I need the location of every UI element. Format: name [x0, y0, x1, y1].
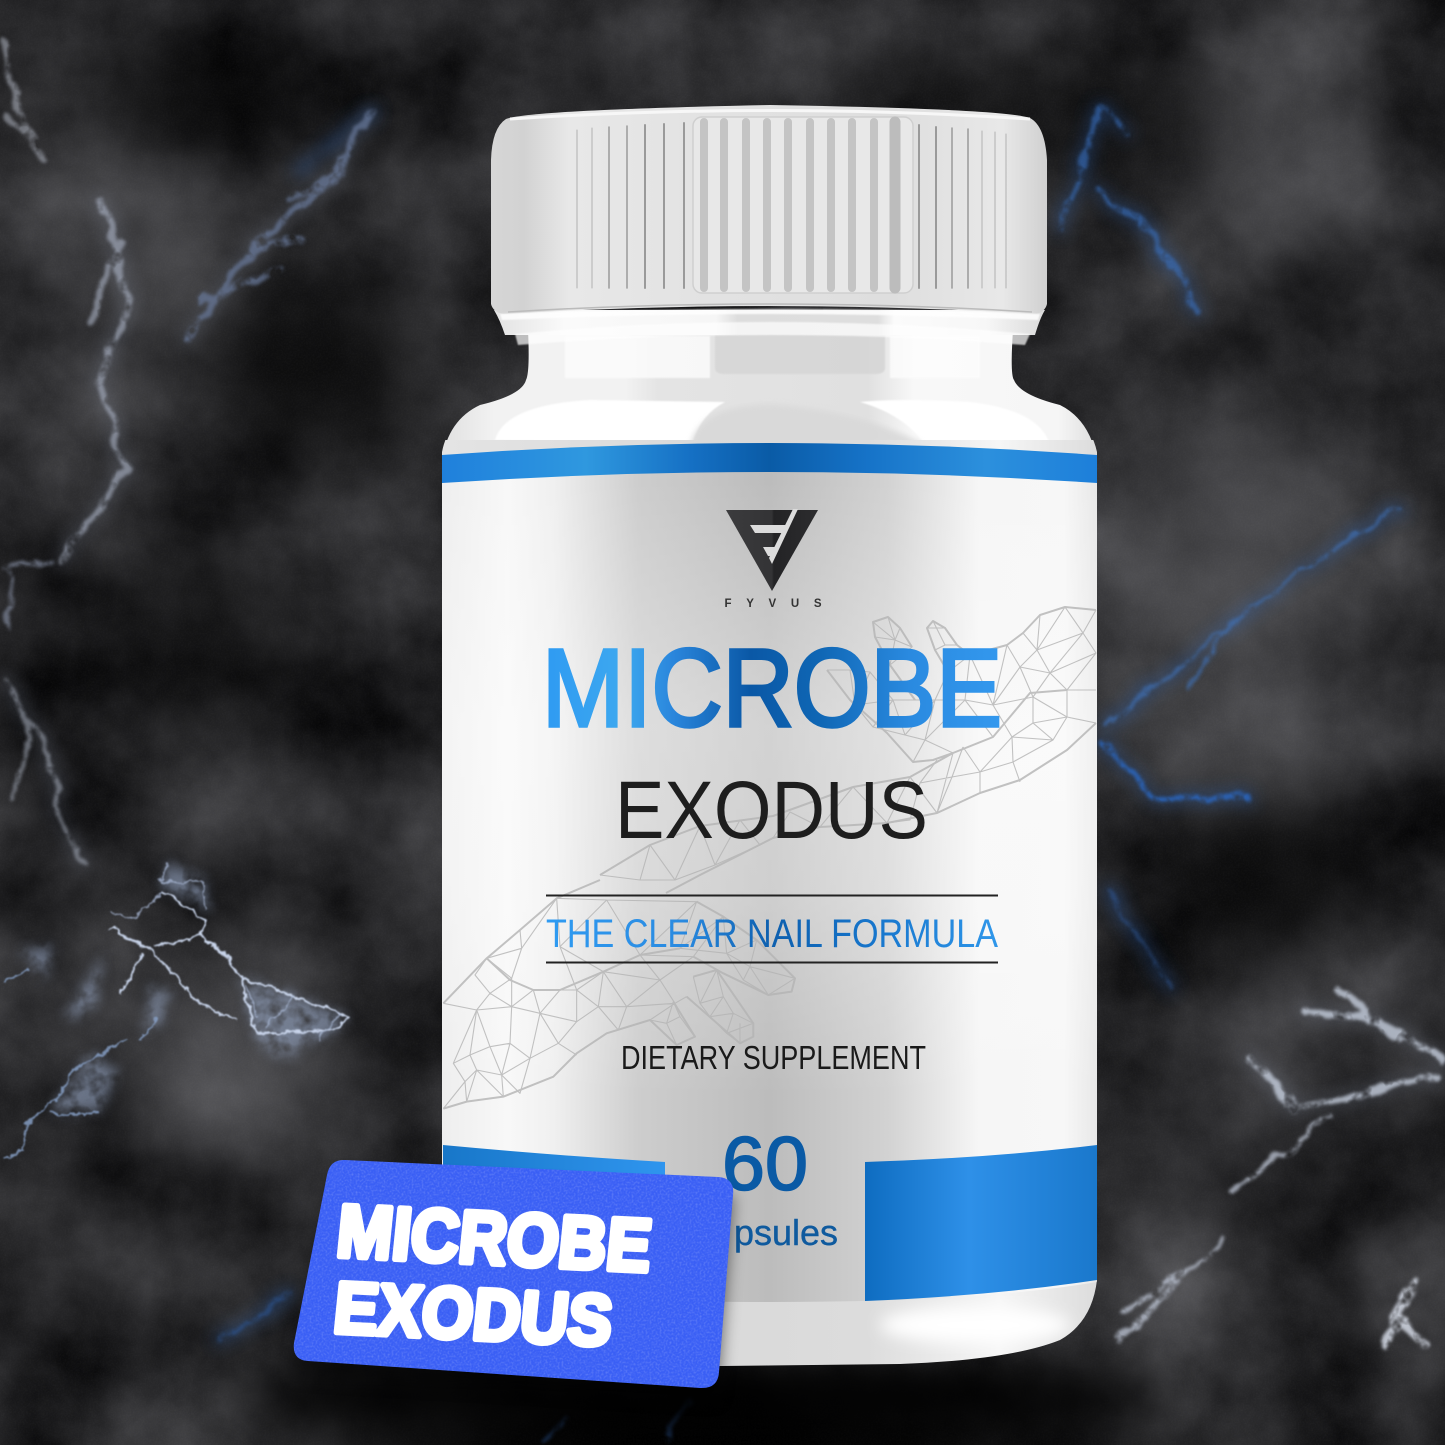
product title: EXODUS: EXODUS	[615, 765, 928, 856]
card surface	[294, 1160, 733, 1388]
blue top band	[442, 443, 1097, 483]
dietary supplement text: DIETARY SUPPLEMENT	[621, 1039, 926, 1076]
bright vein cluster, lower left	[5, 863, 350, 1157]
blue name card	[293, 1160, 733, 1400]
blue bottom block, left	[443, 1145, 665, 1300]
product bottle	[442, 105, 1097, 1370]
card title line 1: MICROBE	[333, 1189, 655, 1287]
blue bottom block, right	[865, 1145, 1097, 1301]
bottle neck and shoulder	[442, 322, 1097, 460]
tagline rule, top	[546, 894, 998, 896]
label logo	[724, 509, 822, 610]
card title line 2: EXODUS	[330, 1268, 616, 1362]
bottle cap	[491, 105, 1047, 345]
capsule count: 60	[722, 1122, 808, 1207]
product title: MICROBE: MICROBE	[542, 627, 1002, 750]
brand name: FYVUS	[724, 598, 822, 610]
wireframe hand from the left	[443, 880, 795, 1109]
capsules label: Capsules	[680, 1212, 838, 1253]
cap ribs	[577, 122, 1006, 288]
tagline rule, bottom	[546, 962, 998, 964]
wireframe hand from the right	[600, 607, 1096, 893]
bottle body	[442, 440, 1097, 1370]
card and bottle contact shadow	[230, 1359, 1170, 1431]
card shadow	[293, 1175, 733, 1400]
tagline: THE CLEAR NAIL FORMULA	[546, 912, 998, 956]
center cap panel	[693, 117, 913, 293]
